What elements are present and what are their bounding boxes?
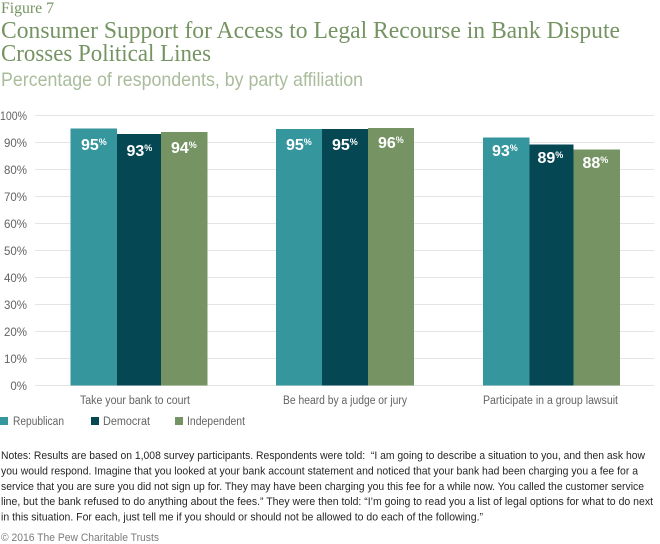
group: be heard by a judge or jury: %: [350, 137, 358, 147]
group: take your bank to court: 95: [81, 137, 99, 154]
group: participate in a group lawsuit: 93: [492, 143, 510, 160]
figure label: Figure 7: [1, 0, 54, 17]
group: be heard by a judge or jury: 95: [286, 137, 304, 154]
y axis gridlines and labels: 40%: [4, 273, 27, 285]
group: be heard by a judge or jury: %: [396, 135, 404, 145]
group: participate in a group lawsuit: %: [555, 150, 563, 160]
y axis gridlines and labels: 20%: [4, 327, 27, 339]
title: Consumer Support for Access to Legal Recourse in Bank Dispute: [1, 17, 620, 44]
notes: you would respond. Imagine that you looked at your bank account statement and noticed that your bank had been charging you a fee for a: [1, 466, 638, 478]
legend: Democrat: [103, 416, 151, 428]
category labels: Participate in a group lawsuit: [483, 395, 619, 407]
category labels: Take your bank to court: [80, 395, 191, 407]
group: be heard by a judge or jury: 95: [332, 137, 350, 154]
y axis gridlines and labels: 50%: [4, 246, 27, 258]
y axis gridlines and labels: 80%: [4, 165, 27, 177]
y axis gridlines and labels: 90%: [4, 138, 27, 150]
y axis gridlines and labels: 60%: [4, 219, 27, 231]
notes: [1, 450, 653, 524]
y axis gridlines and labels: 70%: [4, 192, 27, 204]
title: [1, 17, 620, 67]
notes: line, but the bank refused to do anything about the fees.” They were then told: “I’m going to read you a list of legal options for what to do next: [1, 496, 653, 508]
group: take your bank to court: %: [144, 143, 152, 153]
y axis gridlines and labels: 0%: [10, 381, 27, 393]
subtitle: Percentage of respondents, by party affiliation: [1, 69, 363, 91]
notes: Notes: Results are based on 1,008 survey participants. Respondents were told: “I am going to describe a situation to you, and then ask how: [1, 450, 645, 462]
bar chart: [0, 111, 654, 407]
legend: Republican: [13, 416, 64, 428]
legend: Independent: [187, 416, 246, 428]
title: Crosses Political Lines: [1, 40, 211, 67]
y axis gridlines and labels: 30%: [4, 300, 27, 312]
category labels: Be heard by a judge or jury: [283, 395, 407, 407]
group: take your bank to court: %: [99, 137, 107, 147]
legend: [0, 416, 246, 428]
notes: in this situation. For each, just tell me if you should or should not be allowed to do each of the following.”: [1, 512, 483, 524]
group: participate in a group lawsuit: %: [600, 155, 608, 165]
group: participate in a group lawsuit: %: [510, 143, 518, 153]
group: take your bank to court: [70, 128, 208, 386]
group: be heard by a judge or jury: 96: [378, 135, 396, 152]
copyright: © 2016 The Pew Charitable Trusts: [1, 532, 159, 544]
y axis gridlines and labels: [0, 111, 654, 393]
group: be heard by a judge or jury: %: [304, 137, 312, 147]
group: take your bank to court: 94: [171, 140, 189, 157]
group: take your bank to court: %: [189, 140, 197, 150]
y axis gridlines and labels: 100%: [0, 111, 27, 123]
group: participate in a group lawsuit: [483, 138, 620, 386]
category labels: [80, 395, 619, 407]
group: participate in a group lawsuit: 89: [538, 150, 555, 167]
group: take your bank to court: 93: [126, 143, 144, 160]
y axis gridlines and labels: 10%: [4, 354, 27, 366]
group: be heard by a judge or jury: [276, 128, 414, 386]
notes: service that you are sure you did not sign up for. They may have been charging you this fee for a while now. You called the customer service: [1, 481, 644, 493]
group: participate in a group lawsuit: 88: [582, 155, 600, 172]
